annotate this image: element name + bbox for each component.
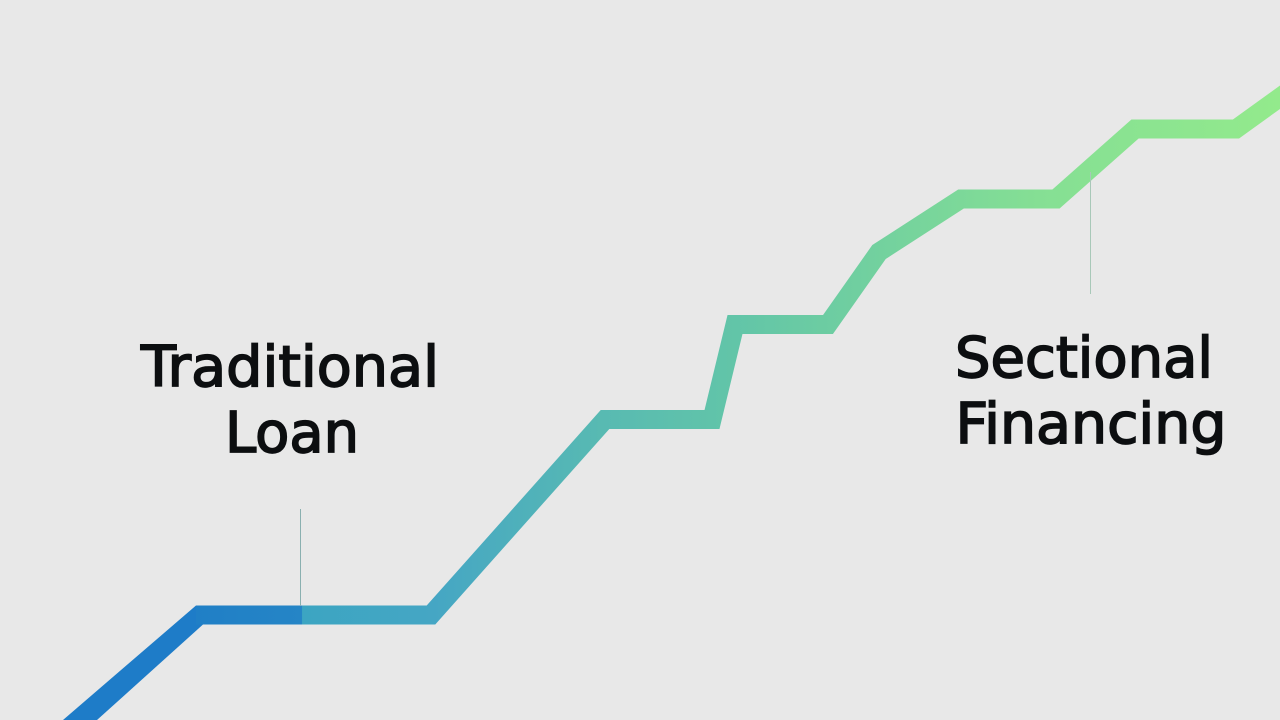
traditional loan pointer xyxy=(300,509,302,606)
sectional financing pointer xyxy=(1090,172,1092,294)
label: sectional financing xyxy=(955,326,1226,457)
label: traditional loan: Traditional xyxy=(140,335,439,400)
label: sectional financing: Sectional xyxy=(955,326,1213,391)
label: sectional financing: Financing xyxy=(956,392,1226,457)
label: traditional loan xyxy=(140,335,439,466)
label: traditional loan: Loan xyxy=(225,401,359,466)
